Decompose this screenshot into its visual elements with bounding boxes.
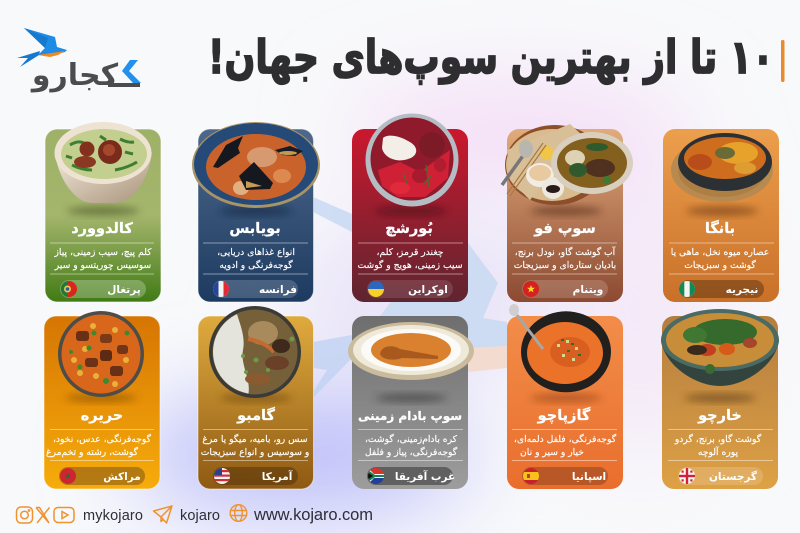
country pill: Georgia: گرجستان: [709, 470, 758, 483]
dish name: خارچو: [697, 408, 742, 424]
icon: telegram: [154, 506, 172, 523]
icon: youtube: [54, 508, 74, 522]
country pill: France: فرانسه: [259, 284, 297, 296]
dish name: سوپ بادام زمینی: [358, 409, 462, 424]
country pill: Ukraine: اوکراین: [408, 284, 448, 296]
handle: kojaro: kojaro: [180, 508, 220, 524]
food: kale soup bowl: [54, 122, 152, 203]
icon: instagram: [16, 507, 32, 523]
ingredients: سوسیس چوریتسو و سیر: [54, 260, 151, 271]
food: seafood plate: [192, 122, 320, 208]
ingredients: و سوسیس و انواع سبزیجات: [201, 447, 309, 458]
food: beet soup bowl: [366, 114, 458, 206]
card: Caldo Verde: [45, 122, 161, 302]
card: Pho: [502, 124, 633, 302]
country pill: Ukraine: [367, 280, 453, 298]
icon: globe: [230, 505, 247, 521]
card: Banga: [663, 129, 779, 302]
ingredients: بادیان ستاره‌ای و سبزیجات: [514, 260, 616, 271]
food: gazpacho bowl: [509, 304, 611, 392]
ingredients: [514, 246, 616, 271]
country pill: Nigeria: [679, 280, 764, 298]
dish name: حریره: [81, 408, 123, 424]
dish name: بُورشچ: [385, 221, 433, 237]
dish name: گامبو: [236, 406, 275, 424]
country pill: Spain: [522, 467, 608, 485]
country pill: Vietnam: [522, 280, 608, 298]
ingredients: [674, 433, 762, 458]
ingredients: کلم پیچ، سیب زمینی، پیاز: [53, 247, 152, 258]
card: Groundnut Soup: [348, 316, 474, 489]
country pill: Nigeria: نیجریه: [726, 284, 758, 296]
dish name: سوپ فو: [533, 221, 596, 237]
card: Gazpacho: [507, 304, 623, 489]
country pill: USA: آمریکا: [262, 470, 293, 483]
ingredients: [357, 247, 463, 271]
ingredients: گوجه‌فرنگی و ادویه: [219, 259, 293, 271]
logo: kojaro: [17, 28, 141, 93]
logo wordmark: کجارو: [30, 58, 119, 93]
ingredients: گوشت گاو، برنج، گردو: [674, 433, 762, 445]
card: Bouillabaisse: [192, 122, 320, 302]
footer: social links: [16, 505, 373, 524]
ingredients: پوره آلوچه: [698, 446, 739, 458]
ingredients: گوجه‌فرنگی، پیاز و فلفل: [365, 446, 458, 458]
ingredients: کره بادام‌زمینی، گوشت،: [365, 433, 458, 445]
country pill: Vietnam: ویتنام: [573, 284, 603, 296]
country pill: France: [213, 280, 298, 298]
card: Borscht: [352, 114, 468, 302]
country pill: Spain: اسپانیا: [572, 471, 606, 483]
country pill: West Africa: غرب آفریقا: [395, 470, 455, 483]
ingredients: سیب زمینی، هویج و گوشت: [357, 259, 463, 271]
ingredients: گوشت، رشته و تخم‌مرغ: [46, 446, 139, 458]
country pill: Portugal: [60, 280, 146, 298]
country pill: West Africa: [367, 467, 455, 485]
country pill: USA: [213, 467, 298, 485]
ingredients: [46, 433, 152, 458]
ingredients: [365, 433, 458, 458]
ingredients: انواع غذاهای دریایی،: [217, 247, 295, 258]
ingredients: چغندر قرمز، کلم،: [377, 247, 443, 258]
card: Kharcho: [661, 309, 779, 489]
website: www.kojaro.com: [253, 506, 373, 524]
ingredients: [671, 247, 769, 271]
ingredients: گوجه‌فرنگی، فلفل دلمه‌ای،: [514, 433, 617, 445]
card: Gumbo: [198, 306, 314, 489]
ingredients: [217, 247, 295, 271]
food: kharcho bowl: [661, 309, 779, 386]
food: peanut soup plate: [348, 322, 474, 380]
ingredients: [201, 433, 309, 458]
country pill: Georgia: [678, 467, 763, 485]
food: pho tray: [502, 124, 633, 205]
card: Harira: [44, 311, 160, 489]
country pill: Morocco: [59, 467, 145, 485]
dish name: بویابس: [229, 221, 281, 237]
country pill: Morocco: مراکش: [103, 471, 141, 483]
dish name: گازپاچو: [537, 406, 591, 424]
ingredients: خیار و سیر و نان: [520, 447, 584, 458]
dish name: کالدوورد: [71, 221, 133, 237]
ingredients: گوشت و سبزیجات: [684, 259, 756, 271]
food: gumbo with rice: [209, 306, 301, 398]
dish name: بانگا: [705, 219, 735, 237]
icon: x: [36, 508, 50, 523]
title: ۱۰ تا از بهترین سوپ‌های جهان!: [208, 30, 774, 85]
ingredients: [53, 247, 152, 271]
food: harira bowl: [58, 311, 144, 397]
food: palm nut stew pot: [671, 133, 773, 202]
ingredients: عصاره میوه نخل، ماهی یا: [671, 247, 769, 258]
ingredients: آب گوشت گاو، نودل برنج،: [515, 246, 616, 258]
ingredients: گوجه‌فرنگی، عدس، نخود،: [53, 433, 152, 445]
ingredients: سس رو، بامیه، میگو یا مرغ: [202, 433, 308, 445]
handle: mykojaro: mykojaro: [83, 508, 143, 524]
icon: swallow bird: [17, 28, 67, 67]
country pill: Portugal: پرتغال: [107, 284, 141, 296]
ingredients: [514, 433, 617, 458]
